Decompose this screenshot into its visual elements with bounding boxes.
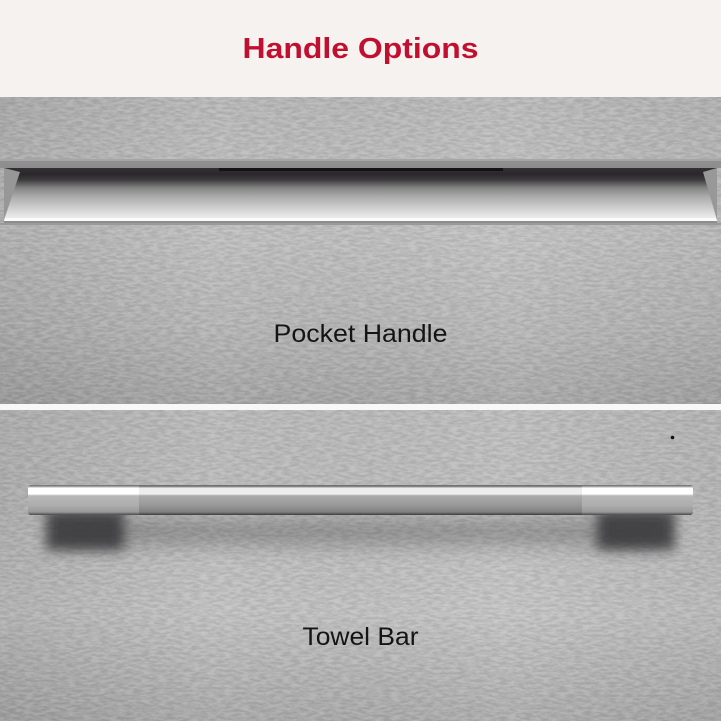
pocket handle recess bbox=[0, 159, 721, 225]
label: pocket handle: Pocket Handle bbox=[274, 320, 448, 348]
towel bar shadows bbox=[46, 510, 675, 550]
label: towel bar: Towel Bar bbox=[302, 623, 418, 651]
panel: towel bar bbox=[0, 410, 721, 721]
towel bar handle bbox=[28, 485, 693, 515]
title banner bbox=[0, 0, 721, 97]
panel: pocket handle bbox=[0, 97, 721, 404]
divider bbox=[0, 404, 721, 410]
title: Handle Options bbox=[242, 33, 478, 65]
speck bbox=[671, 436, 674, 439]
